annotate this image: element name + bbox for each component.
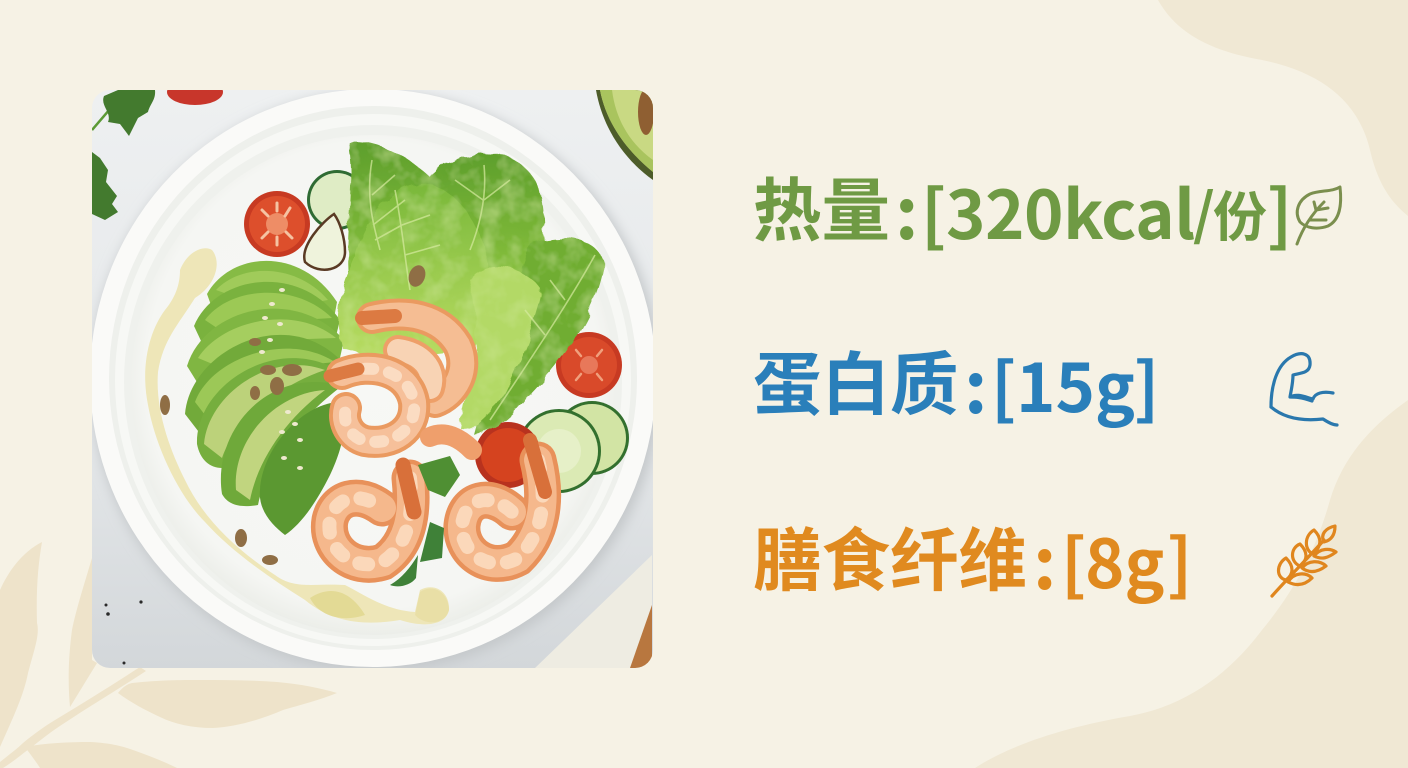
icon: cilantro and tomato garnish bbox=[92, 79, 223, 220]
stat: dietary fiber: 8g bbox=[1085, 511, 1165, 608]
stat: dietary fiber: 膳食纤维 bbox=[753, 506, 1027, 605]
icon: flexed arm bbox=[1269, 352, 1339, 427]
stat: calories: / bbox=[1193, 170, 1215, 251]
romaine lettuce leaves bbox=[338, 142, 604, 434]
plate bbox=[90, 89, 661, 672]
shrimps bbox=[329, 315, 545, 564]
stat: calories: 320kcal bbox=[946, 162, 1195, 259]
stat: protein: : bbox=[964, 329, 987, 434]
stat: calories: : bbox=[895, 155, 918, 260]
stat: protein: 蛋白质 bbox=[753, 330, 959, 429]
icon: wheat bbox=[1270, 524, 1338, 598]
dressing drizzle bbox=[145, 248, 449, 624]
stat: dietary fiber: [ bbox=[1061, 511, 1086, 608]
lettuce veins bbox=[370, 160, 595, 420]
stat: calories: [ bbox=[921, 162, 946, 259]
stat: calories: 热量 bbox=[753, 156, 890, 255]
food photo: salad plate bbox=[92, 90, 653, 668]
icon: leaf bbox=[1296, 185, 1342, 246]
stat: protein: ] bbox=[1134, 335, 1159, 432]
avocado slices bbox=[160, 261, 346, 565]
icon: avocado half bbox=[596, 89, 654, 180]
herb leaves bbox=[390, 456, 460, 586]
stat: protein: [ bbox=[991, 335, 1016, 432]
cucumber and tomato slices bbox=[244, 170, 629, 493]
stat: dietary fiber: : bbox=[1033, 505, 1056, 610]
stat: calories: ] bbox=[1267, 162, 1292, 259]
stat: protein: 15g bbox=[1016, 335, 1135, 432]
stat: dietary fiber: ] bbox=[1167, 511, 1192, 608]
table speckles bbox=[104, 600, 143, 664]
stat: calories: 份 bbox=[1213, 173, 1267, 252]
